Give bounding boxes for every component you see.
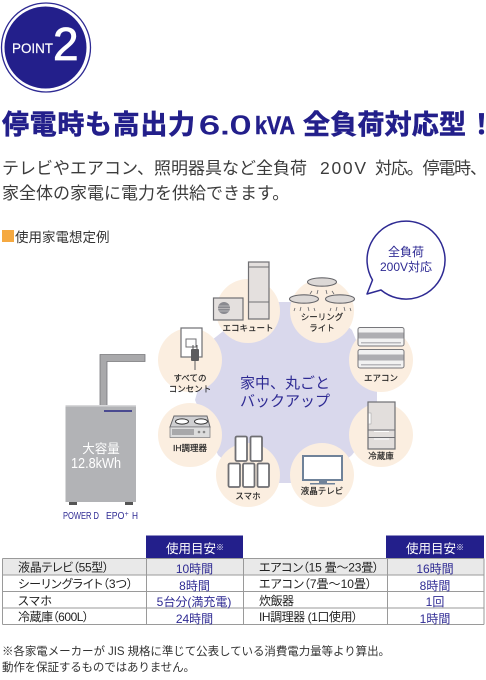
description text: 200V: [320, 158, 366, 178]
description text: [2, 158, 486, 203]
badge: point 2: POINT: [12, 41, 53, 56]
appliance: air conditioner: エアコン: [364, 373, 398, 383]
appliance: eco cute: [214, 262, 280, 343]
product: battery unit with pipe: 大容量: [82, 442, 120, 456]
table header right: 使用目安: [406, 542, 456, 556]
table right column values: 16時間: [416, 562, 454, 576]
appliance: all outlets: コンセント: [169, 384, 211, 394]
product caption: H: [132, 510, 138, 522]
table left column values: [157, 562, 231, 626]
appliance: ceiling light: [290, 278, 354, 343]
appliance: eco cute: エコキュート: [222, 323, 274, 333]
table right column labels: IH調理器 (1口使用）: [259, 609, 358, 624]
description text: テレビやエアコン、照明器具など全負荷: [2, 159, 307, 178]
table right column labels: 炊飯器: [259, 593, 294, 608]
title: 全負荷対応型: [303, 110, 466, 140]
table left column labels: シーリングライト（3つ）: [18, 577, 133, 591]
title: 6.0: [199, 110, 251, 140]
table header left: ※: [216, 543, 224, 552]
section heading: 使用家電想定例: [15, 229, 110, 245]
appliance: smartphones: スマホ: [235, 491, 261, 501]
backup hub octagon: [195, 302, 377, 483]
product caption: POWER D: [63, 510, 99, 522]
title: [2, 110, 486, 140]
table header left: 使用目安: [166, 542, 216, 556]
table left column values: 10時間: [176, 562, 213, 576]
footnote: ※各家電メーカーが JIS 規格に準じて公表している消費電力量等より算出。: [2, 644, 390, 658]
appliance: ceiling light: シーリング: [301, 312, 344, 322]
table left column values: 5台分(満充電): [157, 594, 231, 609]
appliance: air conditioner: [349, 328, 413, 392]
table right column labels: エアコン（7畳～10畳）: [259, 577, 372, 591]
appliance: LCD TV: [290, 443, 354, 507]
table left column labels: 冷蔵庫（600L）: [18, 610, 89, 624]
table right column labels: エアコン（15 畳～23畳）: [259, 560, 379, 574]
appliance: LCD TV: 液晶テレビ: [301, 486, 343, 496]
table right column values: 1回: [426, 595, 444, 609]
product: battery unit with pipe: 12.8kWh: [71, 456, 121, 472]
table left column values: 8時間: [179, 579, 210, 593]
speech bubble: 200V: 200V対応: [380, 260, 432, 274]
table right column values: [416, 562, 454, 626]
appliance: refrigerator: [349, 402, 413, 467]
appliance: ceiling light: ライト: [309, 323, 335, 333]
table right column labels: [259, 560, 379, 624]
table left column labels: スマホ: [18, 594, 52, 608]
table right column values: 1時間: [420, 612, 450, 626]
appliance: smartphones: [216, 436, 280, 507]
appliance: IH cooker: IH調理器: [173, 443, 207, 453]
appliance: IH cooker: [158, 403, 222, 467]
product: battery unit with pipe: [66, 354, 145, 505]
badge: point 2: [2, 3, 90, 92]
backup hub octagon: バックアップ: [240, 393, 330, 410]
badge: point 2: 2: [53, 18, 79, 70]
title: kVA: [255, 112, 295, 140]
appliance: all outlets: [158, 328, 222, 394]
usage table: [2, 536, 484, 626]
title: 停電時も高出力: [2, 110, 195, 140]
description text: 対応。停電時、: [375, 159, 486, 178]
appliance: refrigerator: 冷蔵庫: [368, 451, 394, 461]
product caption: [63, 510, 138, 522]
table header right: [386, 536, 484, 559]
table left column labels: [18, 560, 133, 624]
table left column labels: 液晶テレビ（55型）: [18, 560, 109, 574]
footnote: [2, 644, 390, 674]
speech bubble: 200V: 全負荷: [388, 245, 424, 259]
speech bubble: 200V: [367, 221, 445, 299]
table header left: [146, 536, 243, 559]
product caption: EPO⁺: [106, 510, 129, 522]
table right column values: 8時間: [420, 579, 450, 593]
backup hub octagon: 家中、丸ごと: [240, 375, 330, 392]
appliance: all outlets: すべての: [173, 373, 207, 383]
table left column values: 24時間: [176, 612, 213, 626]
description text: 家全体の家電に電力を供給できます。: [2, 184, 289, 203]
table header right: ※: [456, 543, 464, 552]
footnote: 動作を保証するものではありません。: [2, 660, 195, 674]
